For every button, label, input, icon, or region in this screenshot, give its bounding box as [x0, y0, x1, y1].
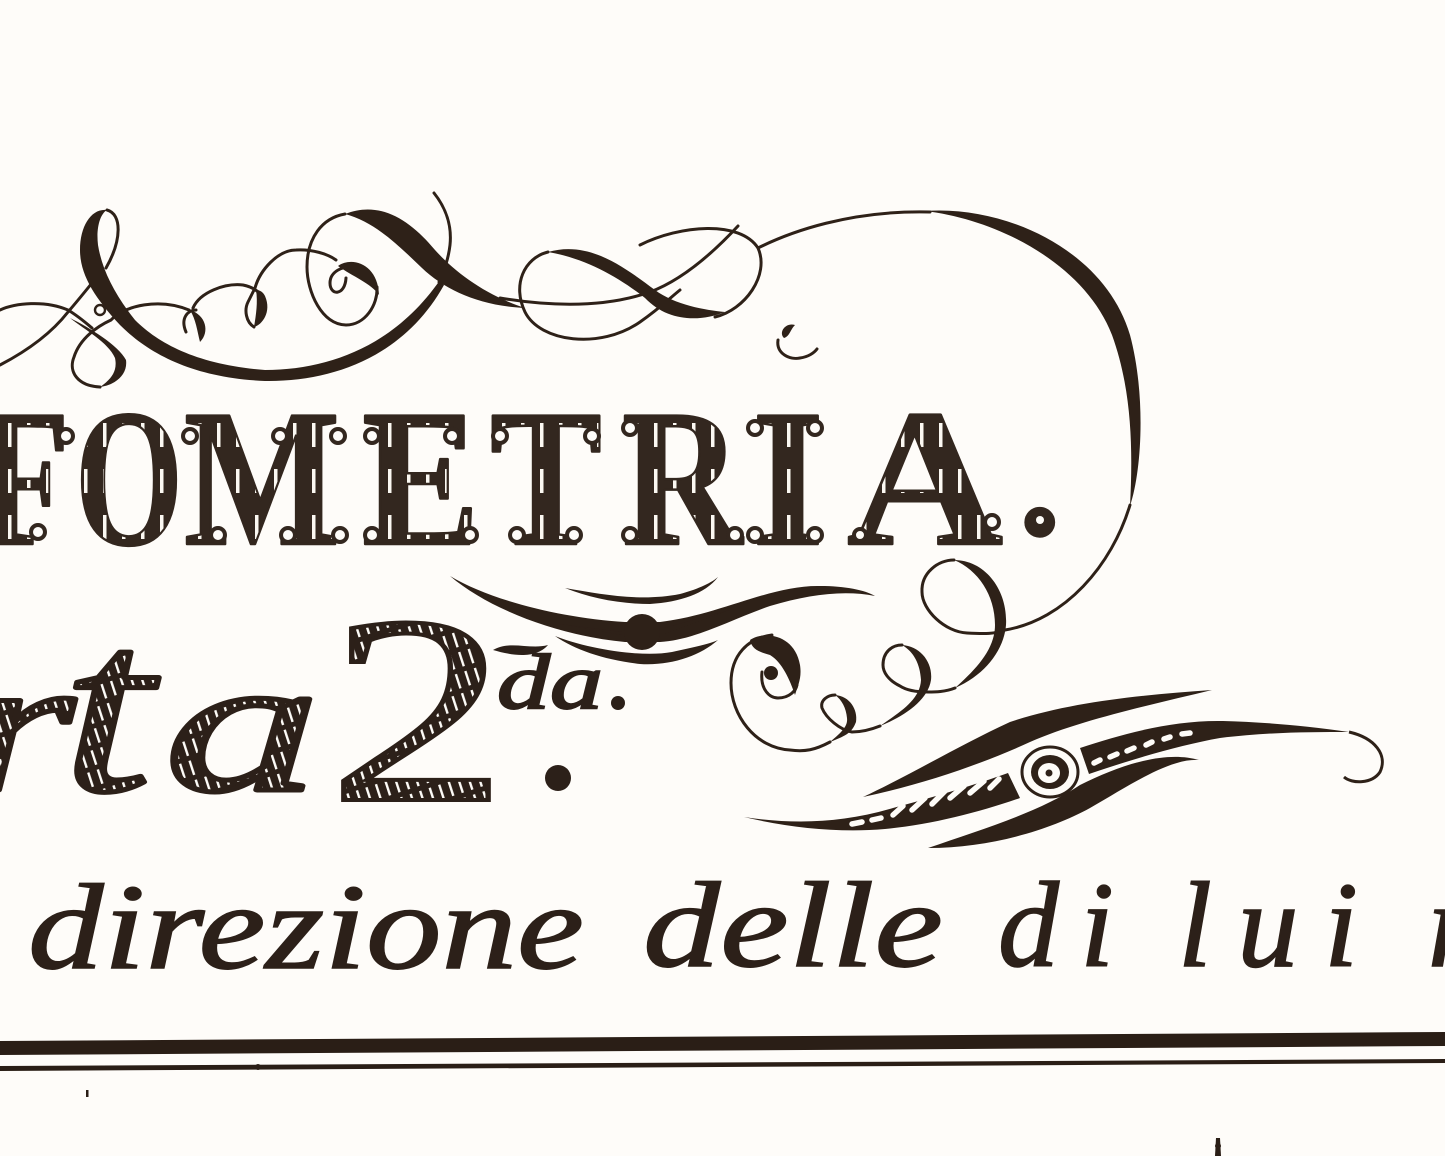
macron over da	[493, 645, 548, 655]
numeral 2: 2	[328, 561, 508, 858]
word lui: lui	[1178, 858, 1358, 993]
period highlight	[1036, 516, 1044, 524]
scroll curls on title letters	[31, 421, 999, 542]
superscript da: da	[497, 638, 603, 725]
word direzione: direzione	[28, 860, 584, 995]
specks and marks at bottom	[86, 1090, 1221, 1156]
central eye rings	[1022, 747, 1078, 797]
central swash ornament	[450, 576, 875, 664]
right barb with tail	[1080, 721, 1349, 774]
title: decorated capitals	[0, 367, 1064, 587]
title: decorated capitals: O	[75, 370, 183, 587]
period after da	[611, 696, 625, 710]
letter a: a	[165, 617, 320, 833]
title: decorated capitals: I	[752, 370, 824, 587]
lower blade	[928, 757, 1199, 848]
engraved line of text	[28, 858, 1445, 995]
title: decorated capitals: T	[490, 370, 602, 587]
word di: di	[998, 858, 1114, 993]
lower looped flourish	[731, 560, 1006, 751]
word delle: delle	[643, 858, 943, 993]
title: decorated capitals: E	[362, 370, 480, 587]
barb highlights	[852, 733, 1190, 824]
double rule	[0, 1032, 1445, 1071]
title: decorated capitals: A	[847, 370, 1003, 587]
subtitle: Carta 2da	[0, 561, 625, 858]
title: decorated capitals: R	[622, 370, 744, 587]
top flourish	[0, 193, 1141, 630]
upper blade	[863, 690, 1212, 797]
period after numeral	[545, 765, 571, 791]
left barb	[744, 773, 1020, 830]
eye ornament	[744, 690, 1382, 848]
title: decorated capitals: M	[184, 370, 340, 587]
word fragment	[0, 572, 320, 843]
letter t: t	[62, 572, 159, 843]
title: decorated capitals: .	[1016, 367, 1064, 577]
